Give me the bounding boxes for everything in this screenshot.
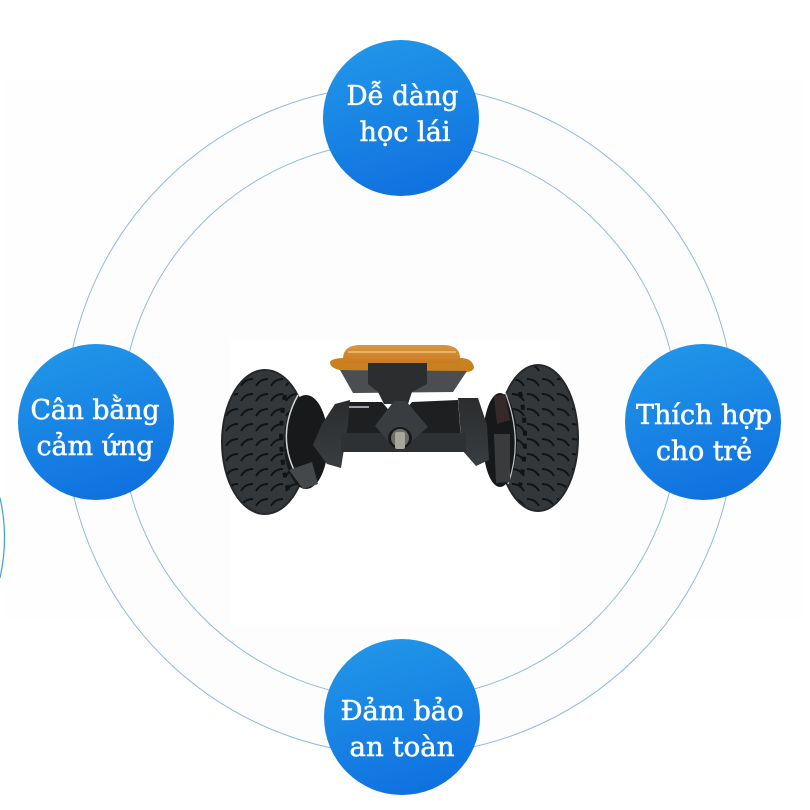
axle bolt	[388, 427, 412, 449]
inner ring	[121, 141, 679, 699]
node: top: học lái	[360, 117, 451, 148]
node: bottom: an toàn	[350, 732, 454, 763]
node: right: cho trẻ	[656, 435, 752, 467]
outer ring	[65, 85, 735, 755]
node: left: Cân bằng	[30, 394, 160, 426]
truck axle	[313, 398, 489, 468]
node: top: Dễ dàng	[346, 80, 458, 112]
baseplate	[368, 363, 427, 404]
left edge arc	[0, 498, 4, 578]
inner disc	[65, 85, 735, 755]
node: right: Thích hợp	[636, 400, 772, 431]
skateboard truck photo	[222, 345, 578, 514]
deck underside mount	[340, 370, 467, 393]
left wheel	[222, 370, 328, 514]
node: left	[18, 344, 174, 500]
node: top	[323, 40, 479, 196]
node: bottom: Đảm bảo	[340, 695, 464, 727]
photo backdrop	[230, 340, 560, 625]
node: left: cảm ứng	[36, 430, 154, 462]
node: right	[625, 344, 781, 500]
node: bottom	[324, 639, 480, 795]
background panel	[5, 80, 805, 620]
deck	[330, 345, 474, 372]
right wheel	[483, 365, 578, 511]
